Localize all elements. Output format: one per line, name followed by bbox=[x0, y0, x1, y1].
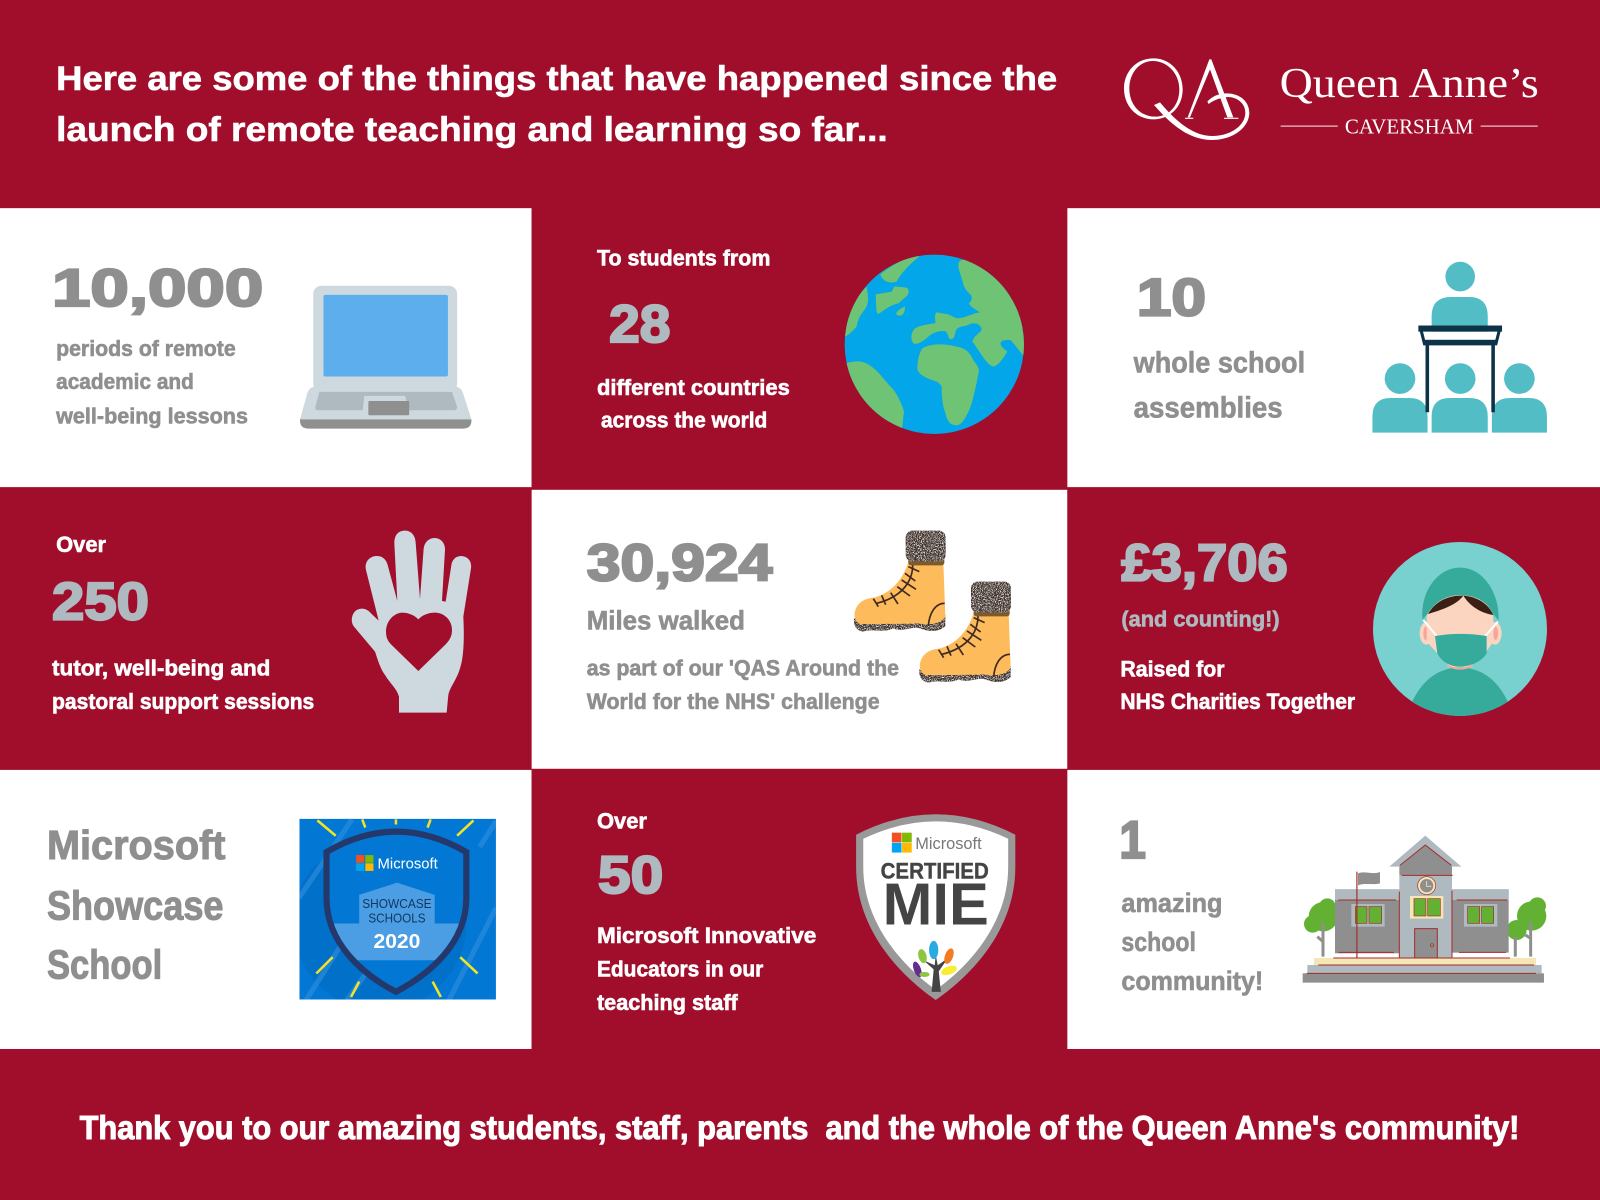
icon: Showcase Schools 2020 badge: SHOWCASE bbox=[362, 896, 432, 911]
description: tutor, well-being and bbox=[52, 656, 270, 681]
panel: 10,000 lessons bbox=[0, 208, 532, 487]
stat: 10,000: 10,000 bbox=[52, 259, 263, 318]
stat: 10: 10 bbox=[1137, 268, 1206, 327]
description bbox=[55, 336, 248, 428]
title: launch of remote teaching and learning so far... bbox=[56, 111, 888, 149]
heading: Microsoft bbox=[47, 822, 226, 868]
description bbox=[587, 656, 899, 714]
icon: Certified MIE shield: Microsoft bbox=[915, 834, 982, 853]
description bbox=[597, 375, 790, 433]
description: Educators in our bbox=[597, 957, 764, 982]
description bbox=[1121, 888, 1263, 996]
description: Microsoft Innovative bbox=[597, 923, 816, 948]
panel: 10 assemblies bbox=[1067, 208, 1600, 487]
description: as part of our 'QAS Around the bbox=[587, 656, 899, 681]
description bbox=[1120, 657, 1355, 714]
stat: 250: 250 bbox=[52, 572, 149, 631]
description: teaching staff bbox=[597, 990, 738, 1015]
heading: School bbox=[47, 942, 162, 988]
panel: fundraising bbox=[1067, 487, 1600, 770]
description: Raised for bbox=[1120, 657, 1225, 682]
description bbox=[1133, 346, 1305, 424]
heading bbox=[47, 822, 226, 988]
description bbox=[597, 923, 816, 1015]
description: amazing bbox=[1121, 888, 1222, 918]
title bbox=[56, 60, 1057, 149]
description: well-being lessons bbox=[55, 403, 248, 428]
icon: Certified MIE shield bbox=[856, 814, 1015, 1000]
subheading: Miles walked bbox=[587, 606, 745, 636]
icon: Showcase Schools 2020 badge: Microsoft bbox=[378, 856, 438, 872]
icon: QA monogram bbox=[1124, 58, 1249, 140]
heading: Showcase bbox=[47, 882, 223, 928]
sub-wordmark: CAVERSHAM bbox=[1345, 115, 1473, 139]
stat: 30,924: 30,924 bbox=[587, 535, 773, 593]
icon: laptop bbox=[300, 286, 471, 429]
description: assemblies bbox=[1134, 391, 1283, 424]
icon: Certified MIE shield: MIE bbox=[883, 870, 989, 937]
title: Here are some of the things that have happened since the bbox=[56, 60, 1057, 98]
description: NHS Charities Together bbox=[1120, 689, 1355, 714]
description: community! bbox=[1121, 966, 1263, 996]
icon: Certified MIE shield: CERTIFIED bbox=[881, 859, 989, 884]
icon: school building bbox=[1303, 836, 1546, 983]
icon: hand with heart bbox=[352, 531, 471, 713]
description bbox=[52, 656, 314, 714]
description: pastoral support sessions bbox=[52, 689, 314, 714]
description: different countries bbox=[597, 375, 790, 400]
stat: £3,706: £3,706 bbox=[1121, 535, 1288, 593]
stat: 50: 50 bbox=[598, 846, 663, 905]
description: school bbox=[1121, 927, 1196, 957]
description: whole school bbox=[1133, 346, 1305, 379]
stat: 1: 1 bbox=[1119, 811, 1146, 870]
stat: 28: 28 bbox=[609, 295, 670, 354]
wordmark: Queen Anne’s bbox=[1280, 61, 1539, 107]
icon: walking boots bbox=[854, 531, 1011, 683]
logo: Queen Anne's Caversham bbox=[1124, 58, 1539, 140]
description: periods of remote bbox=[56, 336, 236, 361]
icon: assembly speaker and audience bbox=[1372, 262, 1547, 433]
description: across the world bbox=[601, 408, 767, 433]
panel: 28 countries bbox=[532, 208, 1067, 490]
icon: Showcase Schools 2020 badge: 2020 bbox=[373, 931, 420, 953]
panel: Microsoft Showcase School bbox=[0, 770, 532, 1049]
note: (and counting!) bbox=[1121, 607, 1280, 632]
description: academic and bbox=[56, 369, 194, 394]
panel: school community bbox=[1067, 770, 1600, 1049]
panel: 250 support sessions bbox=[0, 487, 532, 770]
intro text: Over bbox=[56, 532, 106, 557]
description: World for the NHS' challenge bbox=[587, 689, 880, 714]
icon: Showcase Schools 2020 badge: SCHOOLS bbox=[368, 910, 426, 925]
intro text: To students from bbox=[597, 245, 770, 270]
icon: Showcase Schools 2020 badge bbox=[293, 819, 496, 1010]
icon: globe bbox=[844, 255, 1028, 434]
panel: 30,924 miles bbox=[532, 490, 1067, 769]
panel: 50 Microsoft Innovative Educators bbox=[532, 769, 1067, 1049]
icon: masked medic bbox=[1373, 542, 1547, 720]
intro text: Over bbox=[597, 809, 647, 834]
